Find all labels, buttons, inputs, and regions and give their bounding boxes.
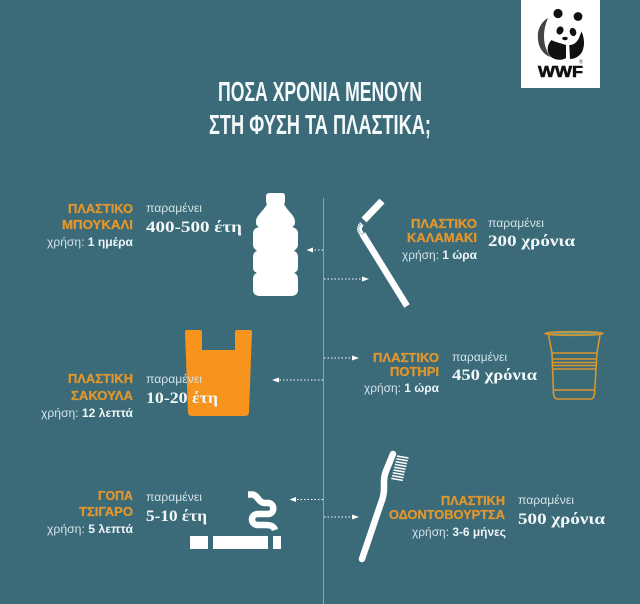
panel: plastic straw (324, 201, 575, 306)
text: toothbrush use time: χρήση: 3-6 μήνες (412, 525, 506, 539)
icon: bottle (253, 193, 298, 296)
text: straw lifetime: 200 χρόνια (488, 233, 575, 250)
panel: plastic bag (41, 330, 323, 420)
text: cigarette lifetime: 5-10 έτη (146, 508, 207, 525)
text: cigarette name: ΓΟΠΑ (98, 489, 133, 503)
text: cigarette name (79, 489, 133, 519)
text: bottle name: ΠΛΑΣΤΙΚΟ (68, 202, 133, 216)
text: cigarette use time: χρήση: 5 λεπτά (47, 522, 134, 536)
arrow: to cup (324, 356, 359, 360)
arrow: to cigarette (290, 497, 323, 502)
icon: panda: ® (579, 58, 583, 66)
text: cup name: ΠΛΑΣΤΙΚΟ (373, 351, 439, 365)
text: cup lifetime: παραμένει (452, 350, 507, 364)
text: cup use time: χρήση: 1 ώρα (364, 381, 440, 395)
arrow: to toothbrush (324, 514, 359, 520)
WWF logo (521, 0, 600, 88)
text: bottle name (62, 202, 133, 232)
panel: plastic cup (324, 332, 603, 399)
text: cigarette name: ΤΣΙΓΑΡΟ (79, 505, 133, 519)
text: straw lifetime (488, 216, 575, 250)
arrow: to bag (272, 378, 323, 382)
text: straw lifetime: παραμένει (488, 216, 544, 230)
text: straw name: ΠΛΑΣΤΙΚΟ (411, 217, 477, 231)
text: straw name (407, 217, 477, 245)
text: bottle lifetime: 400-500 έτη (146, 219, 242, 236)
icon: bag (185, 330, 252, 416)
text: toothbrush lifetime: 500 χρόνια (518, 511, 605, 528)
panel: plastic toothbrush (324, 454, 605, 559)
arrow: to straw (324, 276, 369, 282)
text: bottle use time: χρήση: 1 ημέρα (47, 235, 134, 249)
text: toothbrush lifetime: παραμένει (518, 493, 574, 507)
text: cup lifetime: 450 χρόνια (452, 367, 537, 384)
text: straw name: ΚΑΛΑΜΑΚΙ (407, 231, 477, 245)
text: bottle lifetime (146, 201, 242, 236)
text: straw use time: χρήση: 1 ώρα (402, 248, 478, 262)
panel: cigarette butt (47, 489, 323, 549)
central timeline (323, 198, 324, 604)
text: toothbrush lifetime (518, 493, 605, 528)
text: bottle name: ΜΠΟΥΚΑΛΙ (62, 218, 133, 232)
text: cup name: ΠΟΤΗΡΙ (390, 365, 439, 379)
wordmark: WWF (538, 64, 583, 81)
panel: plastic bottle (47, 193, 323, 296)
text: cigarette lifetime: παραμένει (146, 490, 202, 504)
text: toothbrush name: ΟΔΟΝΤΟΒΟΥΡΤΣΑ (389, 508, 505, 522)
icon: toothbrush (362, 454, 408, 559)
text: bottle lifetime: παραμένει (146, 201, 202, 215)
text: cup name (373, 351, 439, 379)
text: cigarette lifetime (146, 490, 207, 525)
text: bag lifetime: παραμένει (146, 372, 202, 386)
text: toothbrush name (389, 494, 505, 522)
title: ΠΟΣΑ ΧΡΟΝΙΑ ΜΕΝΟΥΝ (218, 76, 422, 107)
icon: cup (545, 332, 603, 399)
text: cup lifetime (452, 350, 537, 384)
text: bag use time: χρήση: 12 λεπτά (41, 406, 134, 420)
text: toothbrush name: ΠΛΑΣΤΙΚΗ (441, 494, 505, 508)
text: bag name: ΣΑΚΟΥΛΑ (71, 389, 133, 403)
text: bag name: ΠΛΑΣΤΙΚΗ (68, 372, 133, 386)
arrow: to bottle (306, 248, 323, 252)
text: bag name (68, 372, 133, 403)
title (209, 76, 431, 140)
text: bag lifetime (146, 372, 218, 407)
text: bag lifetime: 10-20 έτη (146, 390, 218, 407)
icon: cigarette and smoke (190, 494, 281, 549)
icon: straw (357, 201, 407, 306)
title: ΣΤΗ ΦΥΣΗ ΤΑ ΠΛΑΣΤΙΚΑ; (209, 109, 431, 140)
